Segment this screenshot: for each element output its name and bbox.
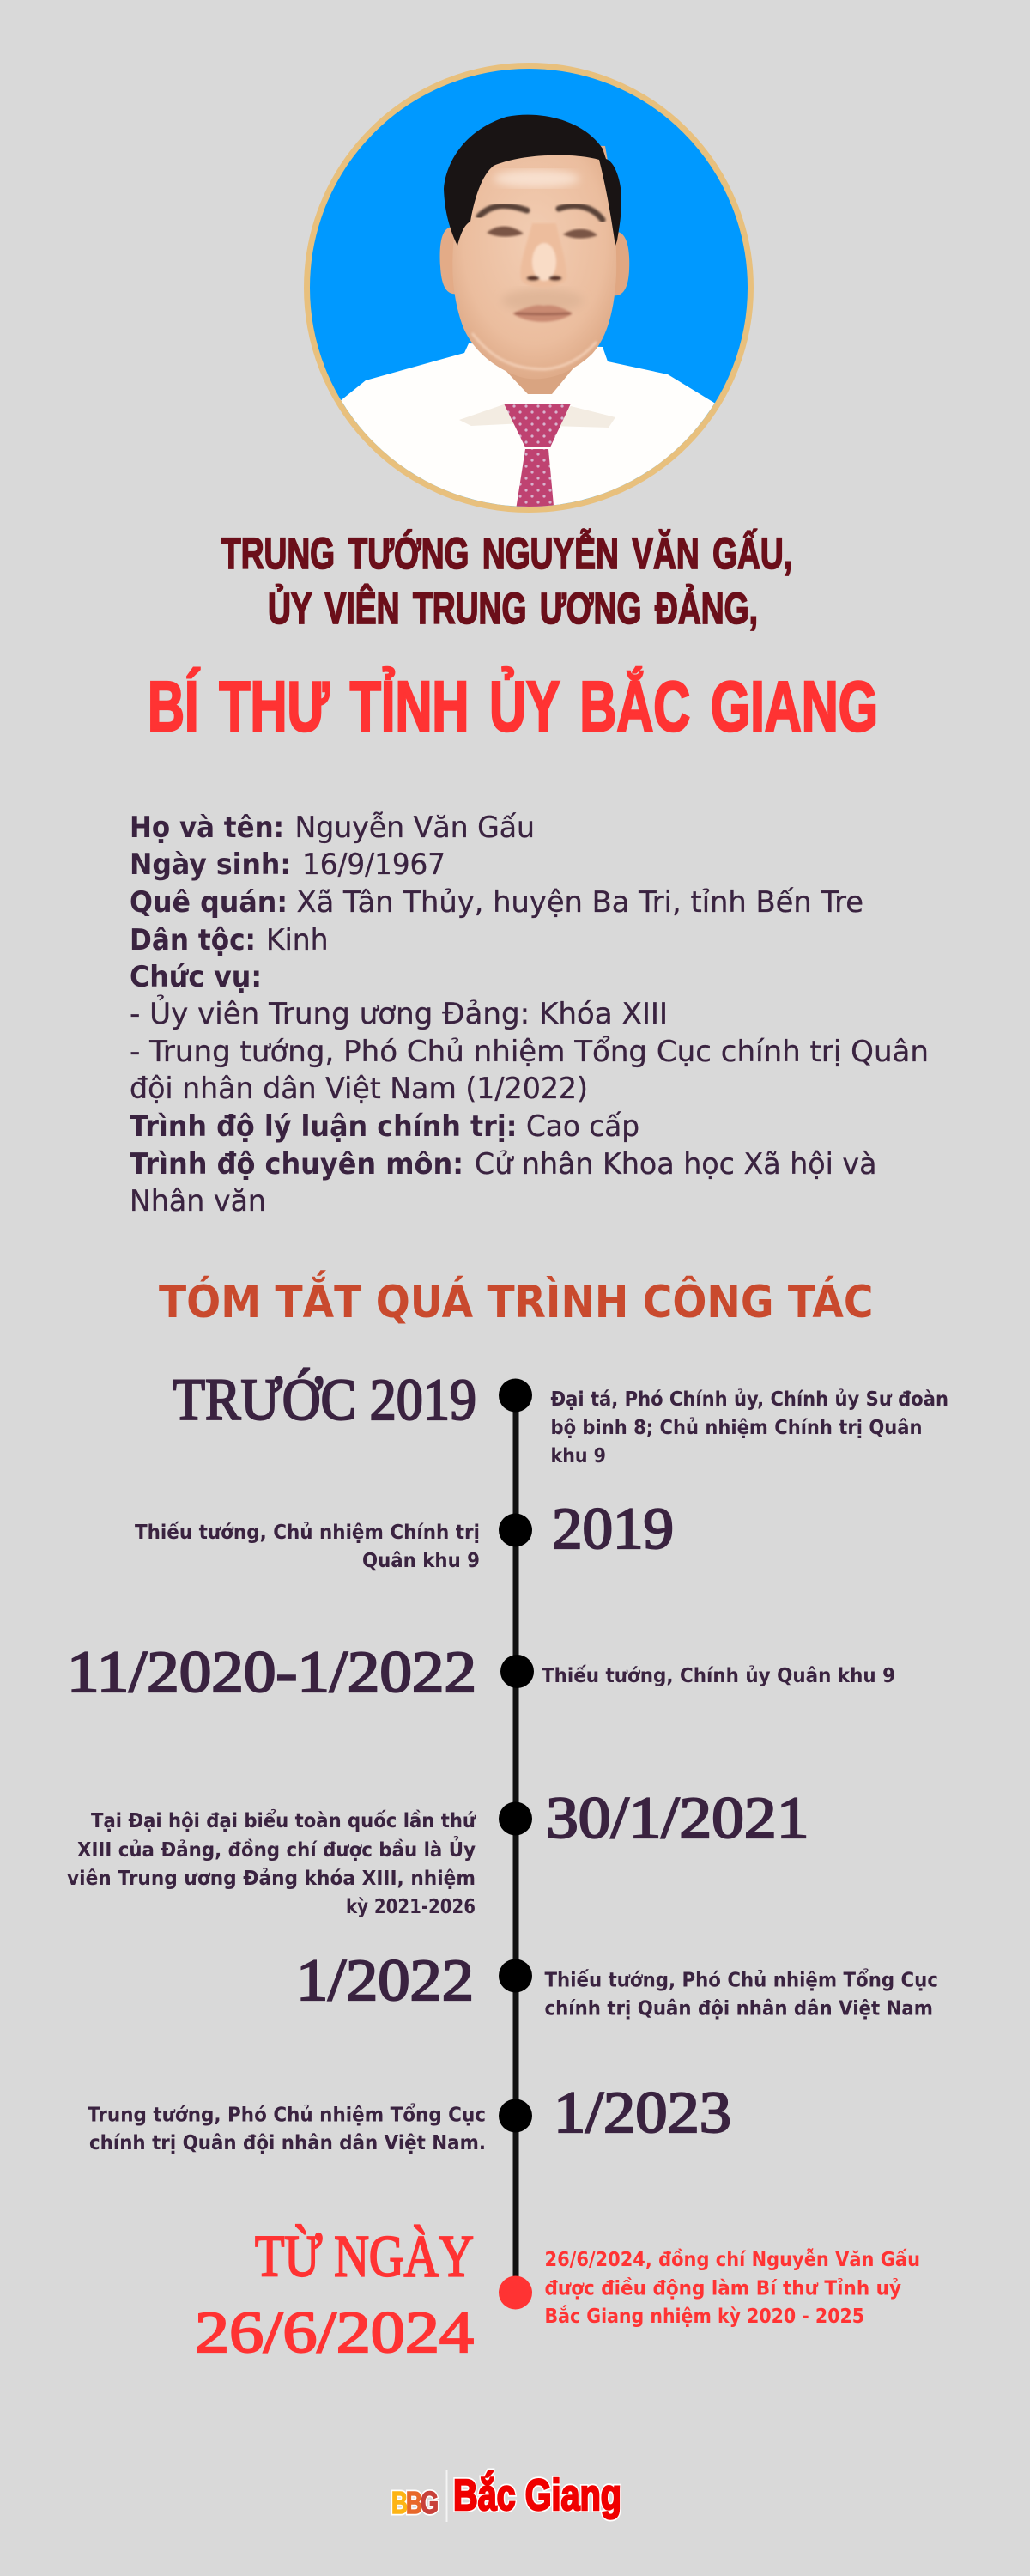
personal information block: Nguyễn Văn Gấu [295, 811, 535, 845]
personal information block: Kinh [266, 923, 328, 957]
logo: Bắc Giang newspaper: B [391, 2485, 408, 2520]
jaw crease [472, 333, 597, 369]
tie [504, 404, 571, 515]
milestone: from 26/6/2024: được điều động làm Bí thư Tỉnh uỷ [544, 2275, 901, 2300]
personal information block: Trình độ chuyên môn: [130, 1147, 464, 1182]
right collar [560, 406, 615, 428]
personal information block: - Ủy viên Trung ương Đảng: Khóa XIII [130, 993, 668, 1031]
portrait photo in circular frame [307, 65, 750, 532]
personal information block: Họ và tên: [130, 811, 284, 845]
milestone: 2019: Thiếu tướng, Chủ nhiệm Chính trị [135, 1520, 480, 1544]
title: rank and party role: TRUNG TƯỚNG NGUYỄN VĂN GẤU, [221, 528, 792, 578]
milestone: 30/1/2021: viên Trung ương Đảng khóa XIII, nhiệm [67, 1866, 476, 1890]
logo: Bắc Giang newspaper: B [406, 2485, 422, 2520]
milestone: 11/2020-1/2022: 11/2020-1/2022 [67, 1639, 476, 1704]
right eye [563, 229, 597, 239]
milestone: 30/1/2021: Tại Đại hội đại biểu toàn quốc lần thứ [91, 1808, 476, 1832]
milestone: 11/2020-1/2022: Thiếu tướng, Chính ủy Quân khu 9 [542, 1663, 895, 1687]
milestone: 1/2023: chính trị Quân đội nhân dân Việt Nam. [89, 2130, 486, 2154]
milestone: 1/2022: chính trị Quân đội nhân dân Việt Nam [544, 1996, 933, 2020]
face [452, 142, 616, 379]
personal information block: đội nhân dân Việt Nam (1/2022) [130, 1072, 588, 1106]
milestone: from 26/6/2024: 26/6/2024, đồng chí Nguyễn Văn Gấu [544, 2247, 920, 2271]
milestone: before 2019: Đại tá, Phó Chính ủy, Chính ủy Sư đoàn [551, 1387, 948, 1411]
milestone: 2019 [135, 1496, 674, 1572]
neck [506, 368, 573, 394]
milestone: 11/2020-1/2022 [67, 1639, 895, 1704]
milestone: 30/1/2021: kỳ 2021-2026 [346, 1894, 476, 1918]
logo: Bắc Giang newspaper [391, 2470, 621, 2522]
right ear [613, 232, 629, 295]
milestone: from 26/6/2024 [195, 2224, 920, 2365]
timeline [67, 1367, 948, 2365]
milestone: 2019: 2019 [552, 1496, 674, 1561]
personal information block: Cử nhân Khoa học Xã hội và [475, 1147, 877, 1182]
personal information block: Cao cấp [526, 1109, 639, 1144]
personal information block: Dân tộc: [130, 923, 256, 957]
left collar [460, 404, 513, 426]
logo: Bắc Giang newspaper: G [421, 2485, 439, 2520]
personal information block: Quê quán: [130, 885, 288, 920]
milestone: 1/2022: Thiếu tướng, Phó Chủ nhiệm Tổng Cục [544, 1968, 938, 1992]
personal information block: Trình độ lý luận chính trị: [130, 1109, 517, 1144]
title: rank and party role: ỦY VIÊN TRUNG ƯƠNG ĐẢNG, [268, 583, 758, 633]
right eyebrow [559, 206, 603, 220]
personal information block: Ngày sinh: [130, 848, 291, 882]
milestone: 1/2023: Trung tướng, Phó Chủ nhiệm Tổng Cục [88, 2102, 486, 2126]
mouth [512, 305, 573, 322]
left eyebrow [479, 206, 527, 216]
shirt [341, 343, 714, 507]
personal information block: Xã Tân Thủy, huyện Ba Tri, tỉnh Bến Tre [297, 885, 863, 920]
personal information block: 16/9/1967 [302, 848, 445, 882]
logo: Bắc Giang newspaper: B [391, 2485, 408, 2520]
moustache shading [505, 289, 579, 309]
logo: Bắc Giang newspaper: Bắc Giang [453, 2470, 621, 2519]
milestone: before 2019 [173, 1367, 948, 1467]
milestone: before 2019: khu 9 [551, 1443, 606, 1467]
milestone: 30/1/2021: XIII của Đảng, đồng chí được bầu là Ủy [77, 1836, 476, 1862]
logo: Bắc Giang newspaper: G [421, 2485, 439, 2520]
milestone: from 26/6/2024: TỪ NGÀY [255, 2224, 474, 2289]
milestone: 1/2022 [296, 1947, 938, 2020]
milestone: 1/2023: 1/2023 [554, 2080, 731, 2145]
milestone: before 2019: bộ binh 8; Chủ nhiệm Chính trị Quân [551, 1415, 922, 1439]
personal information block: Chức vụ: [130, 960, 262, 994]
left eye [487, 227, 524, 237]
milestone: 30/1/2021: 30/1/2021 [546, 1785, 809, 1850]
milestone: from 26/6/2024: Bắc Giang nhiệm kỳ 2020 - 2025 [544, 2304, 864, 2328]
milestone: from 26/6/2024: 26/6/2024 [195, 2300, 474, 2365]
left ear [440, 227, 457, 294]
section heading: TÓM TẮT QUÁ TRÌNH CÔNG TÁC [159, 1270, 874, 1328]
personal information block: Nhân văn [130, 1184, 266, 1218]
nose [520, 223, 566, 288]
milestone: 2019: Quân khu 9 [362, 1548, 480, 1572]
personal information block [130, 811, 929, 1218]
personal information block: - Trung tướng, Phó Chủ nhiệm Tổng Cục chính trị Quân [130, 1035, 929, 1069]
milestone: before 2019: TRƯỚC 2019 [173, 1367, 476, 1432]
forehead highlight [494, 170, 579, 187]
logo: Bắc Giang newspaper: Bắc Giang [453, 2470, 621, 2519]
milestone: 1/2022: 1/2022 [296, 1947, 474, 2013]
logo: Bắc Giang newspaper: B [406, 2485, 422, 2520]
milestone: 1/2023 [88, 2080, 731, 2154]
title: rank and party role [221, 528, 792, 633]
hair [444, 115, 621, 246]
milestone: 30/1/2021 [67, 1785, 809, 1918]
